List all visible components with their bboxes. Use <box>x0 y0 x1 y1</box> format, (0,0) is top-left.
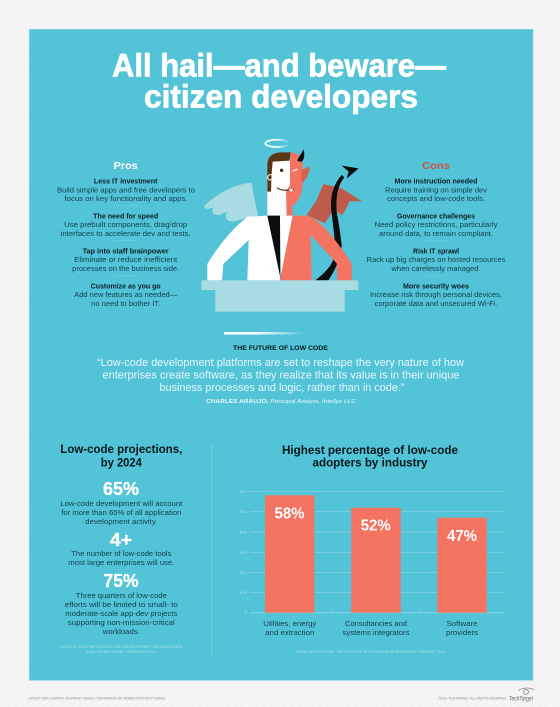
heading: pros: Pros <box>114 160 138 172</box>
lectern <box>201 280 358 312</box>
pro item: less IT investment: focus on key functionality and apps. <box>64 196 188 203</box>
con item: more security woes: corporate data and unsecured Wi-Fi. <box>374 301 498 308</box>
y axis labels: 60% <box>239 490 247 494</box>
panel: pros <box>57 160 195 308</box>
con item: more security woes <box>370 283 502 308</box>
pro item: staff brainpower <box>72 248 179 273</box>
bar: software <box>437 518 487 637</box>
y axis labels <box>239 490 247 615</box>
y axis labels: 40% <box>239 530 247 534</box>
stat: 75%: 75% <box>104 571 138 591</box>
quote: business processes and logic, rather than in code.” <box>160 382 405 394</box>
stat: 4+: 4+ <box>110 530 132 550</box>
stat: 65%: 65% <box>103 479 139 499</box>
icon: devil tail <box>315 166 359 280</box>
heading <box>60 443 182 470</box>
quote <box>97 357 465 394</box>
panel: cons <box>366 160 506 308</box>
chart heading: Highest percentage of low-code <box>282 444 459 457</box>
bar chart <box>239 490 505 637</box>
con item: more instruction needed: concepts and low-code tools. <box>387 196 485 203</box>
icon: devil ear <box>302 167 310 182</box>
pro item: staff brainpower: Tap into staff brainpower <box>83 248 169 255</box>
stat: 75%: efforts will be limited to small- to <box>65 602 178 609</box>
icon: angel ear <box>268 175 273 180</box>
con item: risk IT sprawl: Risk IT sprawl <box>413 248 459 255</box>
logo: TechTarget <box>509 688 534 703</box>
pro item: staff brainpower: processes on the business side. <box>72 266 179 273</box>
y axis labels: 50% <box>239 510 247 514</box>
footer copyright: ©2019 TECHTARGET. ALL RIGHTS RESERVED <box>438 696 507 700</box>
con item: more instruction needed <box>385 178 488 203</box>
pro item: less IT investment: Less IT investment <box>94 178 158 185</box>
heading: THE FUTURE OF LOW CODE <box>233 345 329 352</box>
con item: governance challenges: around data, to remain compliant. <box>379 231 493 238</box>
bar: software: 47% <box>447 528 477 545</box>
illustration: angel and devil developer at lectern <box>201 140 362 312</box>
bar: consultancies: 52% <box>361 518 391 535</box>
stat: 65%: Low-code development will account <box>60 501 182 508</box>
heading: by 2024 <box>101 457 142 470</box>
pro item: customize as you go: Add new features as needed— <box>74 292 177 299</box>
stat: 75%: supporting non-mission-critical <box>68 620 175 627</box>
con item: governance challenges: Need policy restrictions, particularly <box>374 222 498 229</box>
bar: utilities <box>263 495 317 637</box>
icon: devil wing <box>307 184 362 223</box>
source note: EVALUATION GUIDE, FEBRUARY 2019 <box>87 649 156 654</box>
stat: 4+: most large enterprises will use. <box>68 560 174 567</box>
panel: the future of low code <box>97 345 465 405</box>
stat: 75%: moderate-scale app-dev projects <box>65 611 178 618</box>
pro item: the need for speed: Use prebuilt components, drag/drop <box>64 222 187 229</box>
title <box>112 48 446 115</box>
con item: risk IT sprawl <box>366 248 506 273</box>
chart heading: adopters by industry <box>312 457 428 470</box>
con item: governance challenges <box>374 213 498 238</box>
attribution: CHARLES ARAUJO, Principal Analyst, Intellyx LLC <box>206 399 356 405</box>
stat: 75%: workloads. <box>102 629 140 636</box>
title: All hail—and beware— <box>112 48 446 84</box>
stat: 75% <box>65 571 178 636</box>
bar: utilities: 58% <box>274 505 305 522</box>
stat: 75%: Three quarters of low-code <box>76 593 167 600</box>
bar: software: Software <box>446 621 478 628</box>
y axis labels: 0 <box>245 611 247 615</box>
icon: red suit, devil side <box>280 216 352 280</box>
icon: hair <box>267 152 291 192</box>
quote: “Low-code development platforms are set to reshape the very nature of how <box>97 357 465 369</box>
pro item: the need for speed: interfaces to accelerate dev and tests. <box>61 231 191 238</box>
y axis labels: 10% <box>239 591 247 595</box>
stat: 65%: for more than 65% of all application <box>61 510 181 517</box>
bar: software: providers <box>446 630 479 637</box>
y axis labels: 20% <box>239 571 247 575</box>
pro item: customize as you go <box>74 283 177 308</box>
y axis labels: 30% <box>239 551 247 555</box>
con item: risk IT sprawl: Rack up big charges on hosted resources <box>366 257 506 264</box>
source note <box>60 644 183 654</box>
stat: 4+ <box>68 530 174 567</box>
icon: tie <box>267 216 280 277</box>
pro item: less IT investment: Build simple apps and free developers to <box>57 187 195 194</box>
con item: more security woes: Increase risk through personal devices, <box>370 292 502 299</box>
con item: risk IT sprawl: when carelessly managed. <box>390 266 481 273</box>
footer credit: CONTENT: GREG CHARTIER, TECHTARGET; DESIGN: LYNDA ROBISON; ART: SERBEN/ISTOCK/GETTY IMAGES <box>28 696 165 700</box>
accent bar <box>224 332 305 334</box>
icon: neck and face, angel side <box>267 161 290 216</box>
source note: SOURCE: GARTNER'S LOW-CODE DEVELOPMENT TECHNOLOGIES <box>60 644 183 649</box>
con item: more instruction needed: More instruction needed <box>394 178 478 185</box>
panel: highest percentage of low-code adopters <box>239 444 505 654</box>
logo: TechTarget: TechTarget <box>509 696 533 703</box>
con item: more security woes: More security woes <box>403 283 469 290</box>
pro item: customize as you go: Customize as you go <box>91 283 161 290</box>
panel: low-code projections <box>60 443 183 654</box>
stat: 65% <box>60 479 182 526</box>
pro item: the need for speed: The need for speed <box>93 213 158 220</box>
stat: 4+: The number of low-code tools <box>71 551 172 558</box>
pro item: the need for speed <box>61 213 191 238</box>
icon: eyes and smile <box>277 169 297 192</box>
con item: governance challenges: Governance challenges <box>397 213 475 220</box>
icon: white suit, angel side <box>207 216 280 280</box>
icon: devil horn <box>297 149 304 162</box>
title: citizen developers <box>144 79 418 115</box>
bar: utilities: and extraction <box>265 630 314 637</box>
source note: FROM OUTSYSTEMS' THE STATE OF APPLICATION DEVELOPMENT REPORT, 2019 <box>296 649 445 654</box>
chart heading <box>282 444 459 470</box>
icon: halo <box>265 140 289 147</box>
heading: cons: Cons <box>422 160 450 172</box>
pro item: staff brainpower: Eliminate or reduce inefficient <box>74 257 177 264</box>
bar: consultancies: systems integrators <box>342 630 410 637</box>
bar: consultancies <box>342 508 410 637</box>
con item: more instruction needed: Require training on simple dev <box>385 187 488 194</box>
icon: devil side of head <box>286 152 303 217</box>
pro item: customize as you go: no need to bother IT. <box>91 301 160 308</box>
pro item: less IT investment <box>57 178 195 203</box>
icon: angel wing <box>204 183 258 222</box>
bar: utilities: Utilities, energy <box>263 621 317 628</box>
stat: 65%: development activity. <box>85 519 157 526</box>
heading: Low-code projections, <box>60 443 182 456</box>
quote: enterprises create software, as they realize that its value is in their unique <box>102 370 460 382</box>
bar: consultancies: Consultancies and <box>345 621 407 628</box>
icon: shirt <box>280 216 293 277</box>
